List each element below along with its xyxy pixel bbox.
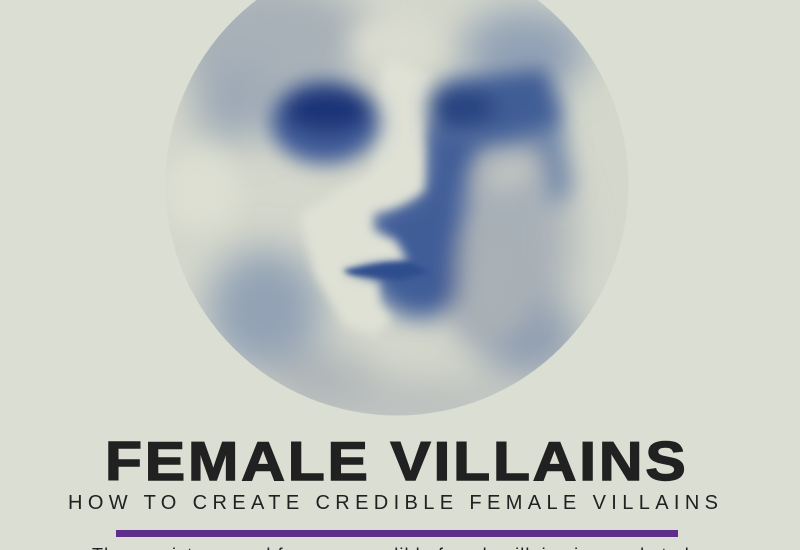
subtitle: HOW TO CREATE CREDIBLE FEMALE VILLAINS (68, 492, 718, 514)
illustration: blurred face in circle (160, 0, 629, 430)
divider bar (116, 530, 678, 537)
title: FEMALE VILLAINS (105, 431, 686, 492)
light profile of the face (300, 58, 430, 335)
lips (343, 262, 430, 280)
